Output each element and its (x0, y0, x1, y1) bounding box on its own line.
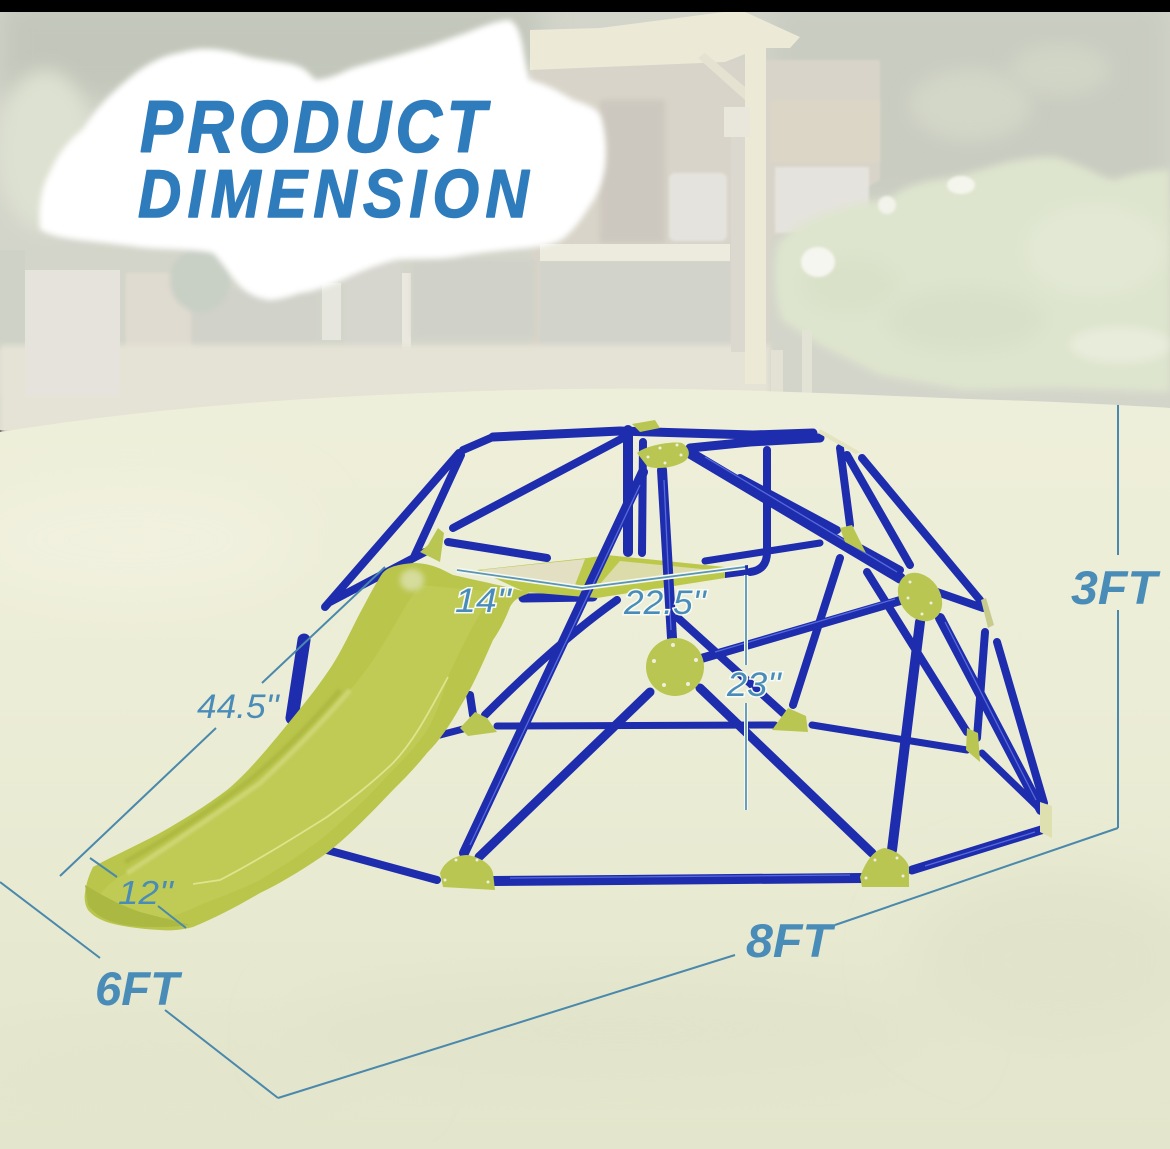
center to right plate (703, 600, 902, 658)
line: 3FT (1117, 405, 1119, 828)
tube highlights (470, 457, 1036, 878)
lawn (0, 389, 1170, 1149)
rear diagonals (470, 558, 967, 732)
label: 6FT: 6FT (95, 962, 183, 1015)
long tube (464, 472, 643, 853)
climbing dome: front tubes (327, 453, 1041, 881)
label: 8FT: 8FT (746, 914, 836, 967)
top plate to right plate (690, 453, 900, 578)
plate: bottom left (440, 855, 495, 890)
plate: right (889, 564, 951, 630)
top left tubes (325, 437, 623, 607)
line: 23 inch (744, 575, 748, 810)
lower ring (440, 725, 1044, 813)
slide (85, 563, 530, 930)
pergola (530, 12, 800, 384)
label: 3FT: 3FT (1071, 561, 1161, 614)
joint: lower center (772, 708, 808, 732)
label: 44.5 inch: 44.5'' (197, 688, 281, 726)
joint: lower left (460, 712, 497, 736)
connector plates (420, 420, 1052, 890)
hedge (775, 157, 1170, 392)
label: 14 inch: 14'' (455, 582, 513, 620)
right lower tubes (977, 632, 1044, 803)
white cloud behind title (39, 20, 606, 300)
line: 6FT (0, 882, 278, 1098)
plate bolts (444, 444, 932, 884)
platform (477, 555, 748, 598)
joint: top center small (632, 420, 660, 432)
climbing dome: rear tubes (292, 430, 1044, 813)
right plate to base (892, 622, 920, 850)
garden background (0, 0, 1170, 435)
back of frame verticals (623, 430, 633, 552)
plate: center (646, 638, 704, 696)
line: 44.5 inch (60, 567, 385, 876)
top black bar (0, 0, 1170, 12)
dimension lines (0, 405, 1118, 1098)
joint: right mid (840, 525, 866, 553)
plate: bottom right (860, 848, 909, 887)
right upper tubes (740, 448, 983, 608)
center to bottom (479, 688, 872, 857)
plate: top center (637, 443, 689, 468)
line: 8FT (278, 828, 1118, 1098)
joint: lower right (966, 728, 980, 762)
line: 12 inch (90, 858, 186, 928)
bottom ring (327, 850, 437, 880)
title (138, 86, 530, 232)
rear hoop and mid ring (750, 450, 767, 572)
line: 14 inch and 22.5 inch (457, 567, 745, 588)
title: DIMENSION (138, 155, 530, 232)
tube behind slide (292, 640, 304, 718)
under platform tube (523, 597, 593, 598)
joint: far right (1040, 802, 1052, 838)
joint: left mid (420, 528, 444, 562)
joint: right edge (981, 598, 994, 628)
top plate to center (662, 470, 672, 638)
dimension labels (95, 561, 1161, 1015)
top ring tubes (493, 431, 820, 448)
joint: top right (818, 429, 860, 454)
label: 22.5 inch: 22.5'' (623, 584, 708, 622)
label: 23 inch: 23'' (726, 666, 783, 704)
title: PRODUCT (140, 86, 491, 168)
label: 12 inch: 12'' (118, 874, 175, 911)
